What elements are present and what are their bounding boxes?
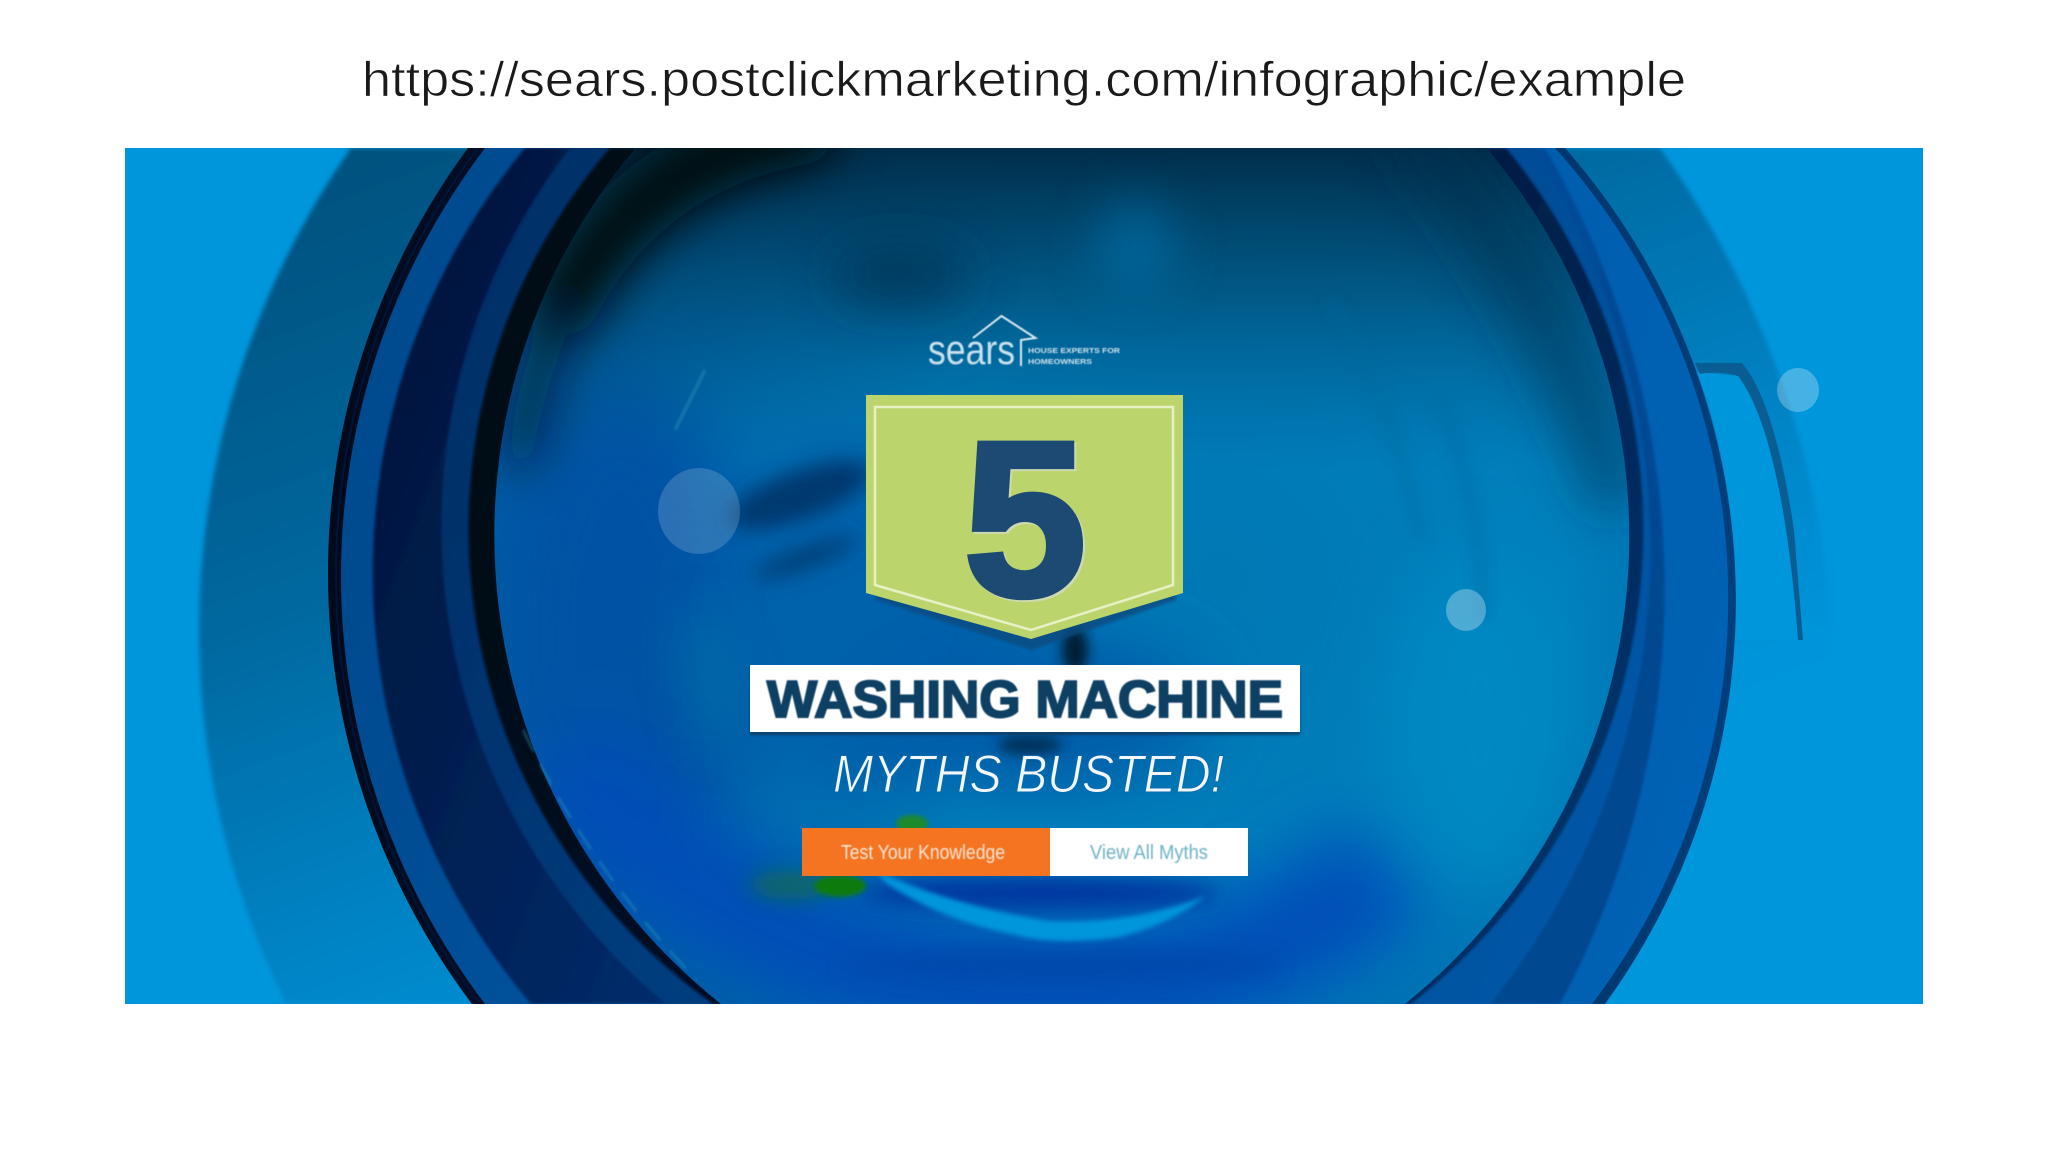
drum ring: navy band — [373, 148, 1665, 1004]
green garment — [814, 815, 928, 897]
logo: sears: HOMEOWNERS — [1028, 357, 1092, 366]
heading bar: washing machine: WASHING MACHINE — [767, 671, 1283, 729]
button: test your knowledge: Test Your Knowledge — [841, 842, 1005, 864]
badge: 5: 5 — [964, 396, 1086, 642]
button: view all myths: View All Myths — [1090, 842, 1208, 864]
dark garment — [998, 626, 1088, 755]
foam arc — [875, 870, 1206, 941]
drum ring: rim — [328, 148, 1736, 1004]
button: view all myths — [1050, 828, 1248, 876]
bubble: center — [1446, 589, 1486, 631]
title: https://sears.postclickmarketing.com/infographic/example — [362, 53, 1686, 107]
bubble: large — [658, 468, 740, 554]
badge: 5 — [866, 395, 1183, 650]
panel: washing machine hero — [125, 130, 1923, 1004]
drum ring: inner blue band — [441, 148, 1650, 1004]
logo: sears: sears — [928, 326, 1015, 373]
icon: door handle — [1695, 363, 1803, 640]
bubble: right — [1777, 368, 1819, 412]
logo: sears — [928, 316, 1121, 373]
drum ring: outer blue band — [341, 148, 1728, 1004]
drum interior with motion-blurred laundry — [480, 130, 1640, 1004]
logo: sears: HOUSE EXPERTS FOR — [1028, 346, 1121, 355]
drum ring: black gasket — [469, 148, 1643, 1004]
washer door outer ring — [199, 148, 1834, 1004]
subheading: MYTHS BUSTED! — [833, 745, 1224, 804]
button: test your knowledge — [802, 828, 1050, 876]
